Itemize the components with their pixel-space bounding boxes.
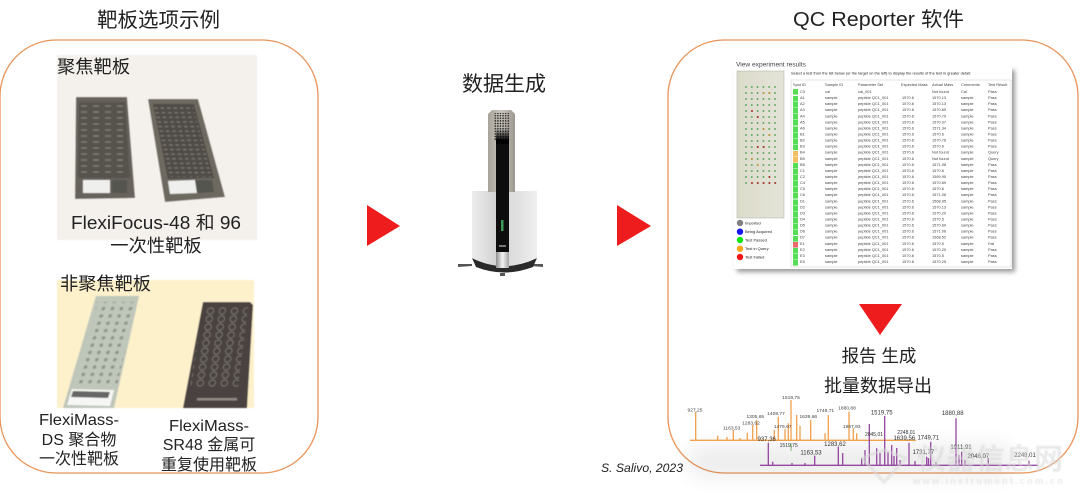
results table: Pass [988, 113, 997, 118]
results table: sample [961, 210, 974, 215]
results table: Pass [988, 168, 997, 173]
results table: peptide QC1_001 [858, 132, 889, 136]
results table: sample [825, 125, 838, 130]
results table [791, 80, 1011, 267]
results table: C6 [800, 192, 805, 197]
results table: Pass [988, 180, 997, 185]
results table: B2 [800, 138, 805, 143]
results table: 1570.20 [932, 247, 947, 252]
results table: Query [988, 150, 999, 155]
chart: orange mass spectrum: 1519,75 [782, 395, 800, 401]
results table: sample [961, 150, 974, 155]
results table: 1570.6 [902, 222, 914, 228]
results table: peptide QC1_001 [858, 192, 889, 197]
results table: Pass [988, 198, 997, 203]
results table: sample [825, 180, 838, 185]
results table: sample [961, 144, 974, 149]
results table: Pass [988, 259, 997, 264]
results table: 1570.6 [902, 119, 914, 124]
status legend: Being Acquired [745, 229, 772, 234]
results table: 1570.6 [902, 180, 914, 185]
chart: orange mass spectrum [688, 395, 916, 440]
results table: sample [825, 156, 838, 161]
results table: 1570.6 [902, 144, 914, 149]
results table: cal_001 [858, 89, 872, 94]
results table: sample [961, 216, 974, 222]
results table: E3 [800, 253, 805, 258]
results table: B3 [800, 144, 805, 149]
results table: 1569.95 [932, 174, 946, 179]
results table: sample [825, 132, 838, 136]
results table: Parameter Set [858, 82, 884, 87]
results table: sample [961, 132, 974, 136]
results table: Pass [988, 132, 997, 136]
results table: sample [825, 253, 838, 258]
results table: 1568.52 [932, 235, 946, 240]
results table: 1570.25 [932, 259, 946, 264]
results table: sample [961, 101, 974, 106]
results table: 1570.69 [932, 180, 946, 185]
results table: Pass [988, 119, 997, 124]
results table: sample [825, 259, 838, 264]
results table: sample [961, 107, 974, 112]
results table: sample [825, 138, 838, 143]
results table: peptide QC1_001 [858, 259, 889, 264]
chart: orange mass spectrum: 1163,53 [723, 426, 741, 432]
results table: 1570.6 [902, 125, 914, 130]
results table: sample [961, 168, 974, 173]
results table: peptide QC1_001 [858, 144, 889, 149]
label: non-focusing target: 非聚焦靶板 [60, 274, 151, 294]
results table: Not found [932, 156, 949, 161]
results table: 1570.6 [902, 162, 914, 167]
results table: B1 [800, 132, 805, 136]
results table: 1570.5 [932, 241, 944, 246]
results table: Pass [988, 222, 997, 228]
caption: FlexiMass-SR48: FlexiMass- [169, 418, 249, 435]
icon: mass spectrometer [458, 110, 543, 276]
chart: orange mass spectrum: 1408,77 [767, 411, 785, 417]
label: focusing target: 聚焦靶板 [57, 56, 130, 77]
results table: sample [961, 174, 974, 179]
status legend: Test Failed [745, 254, 764, 260]
results table: peptide QC1_001 [858, 235, 889, 240]
results table: Pass [988, 253, 997, 258]
heading: QC Reporter software: QC Reporter 软件 [793, 8, 964, 31]
results table: 1570.13 [932, 101, 946, 106]
results table: Not found [932, 150, 949, 155]
results table: 1570.6 [902, 113, 914, 118]
results table: sample [961, 247, 974, 252]
results table: 1571.06 [932, 229, 946, 234]
results table: B5 [800, 156, 805, 161]
photo: focusing targets [57, 55, 257, 240]
results table: Spot ID [793, 82, 806, 87]
results table: peptide QC1_001 [858, 210, 889, 215]
results table: Pass [988, 210, 997, 215]
panel: target options [0, 40, 318, 473]
results table: 1570.6 [902, 186, 914, 191]
results table: sample [825, 222, 838, 228]
results table: 1571.34 [932, 125, 947, 130]
caption: FlexiFocus: FlexiFocus-48 和 96 [71, 213, 241, 233]
chart: purple mass spectrum: 1283,62 [824, 442, 846, 448]
chart: purple mass spectrum: 1880,88 [942, 411, 964, 417]
chart: purple mass spectrum: 1749,71 [917, 436, 940, 442]
watermark: 仪器信息网 [917, 443, 1063, 476]
results table: A2 [800, 101, 805, 106]
results table: sample [825, 174, 838, 179]
instruction line: Select a test from the list below (or the target on the left) to display the results of the test in greater detail: [791, 70, 971, 76]
chart: orange mass spectrum: 1479,67 [774, 424, 792, 430]
results table: peptide QC1_001 [858, 150, 889, 155]
results table: peptide QC1_001 [858, 168, 889, 173]
results table: Pass [988, 101, 997, 106]
results table: sample [825, 144, 838, 149]
results table: sample [961, 186, 974, 191]
caption: FlexiMass-SR48: SR48 金属可 [163, 436, 255, 454]
results table: 1570.6 [902, 168, 914, 173]
results table: C4 [800, 180, 806, 185]
results table: Pass [988, 247, 997, 252]
results table: peptide QC1_001 [858, 180, 889, 185]
results table: 1570.13 [932, 95, 946, 100]
chart: purple mass spectrum: 1731,77 [912, 450, 935, 456]
results table: peptide QC1_001 [858, 174, 889, 179]
chart: purple mass spectrum: 2045,01 [865, 432, 883, 438]
screenshot: experiment results [734, 58, 1015, 272]
results table: sample [825, 101, 838, 106]
results table: Pass [988, 192, 997, 197]
results table: sample [825, 168, 838, 173]
plate: FlexiMass-SR48 [183, 302, 253, 408]
results table: sample [961, 113, 974, 118]
results table: A3 [800, 107, 805, 112]
status legend: Test Passed [745, 238, 767, 242]
results table: sample [961, 235, 974, 240]
results table: peptide QC1_001 [858, 253, 889, 258]
results table: 1570.6 [902, 247, 914, 252]
results table: 1570.07 [932, 119, 946, 124]
results table: sample [961, 241, 974, 246]
results table: sample [961, 204, 974, 209]
results table: Comments [961, 82, 980, 87]
results table: 1570.6 [932, 132, 944, 136]
results table: peptide QC1_001 [858, 204, 889, 209]
caption: FlexiMass-DS [39, 412, 119, 468]
results table: sample [825, 186, 838, 191]
panel: QC Reporter software [668, 40, 1078, 473]
results table: peptide QC1_001 [858, 162, 889, 167]
chart: orange mass spectrum: 1305,65 [746, 414, 764, 420]
results table: peptide QC1_001 [858, 125, 889, 130]
plate: FlexiFocus-96 [148, 99, 225, 202]
results table: D5 [800, 222, 805, 228]
results table: Sample ID [825, 82, 843, 87]
results table: cal [825, 89, 830, 94]
results table: Pass [988, 162, 997, 167]
results table: C2 [800, 174, 805, 179]
results table: 1570.20 [932, 210, 947, 215]
results table: A6 [800, 125, 805, 130]
results table: A1 [800, 95, 805, 100]
results table: 1570.69 [932, 222, 946, 228]
caption: FlexiMass-DS: 一次性靶板 [39, 450, 119, 468]
chart: purple mass spectrum: 1639,56 [893, 436, 916, 442]
results table: 1570.6 [932, 186, 944, 191]
results table: peptide QC1_001 [858, 186, 889, 191]
results table: peptide QC1_001 [858, 95, 889, 100]
results table: Pass [988, 107, 997, 112]
plate: FlexiFocus-48 [75, 97, 135, 199]
results table: D3 [800, 210, 805, 215]
results table: Pass [988, 125, 997, 130]
results table: peptide QC1_001 [858, 113, 889, 118]
chart: purple mass spectrum: 2248,01 [897, 430, 916, 436]
results table: A4 [800, 113, 806, 118]
results table: Fail [988, 241, 994, 246]
caption: FlexiMass-SR48: 重复使用靶板 [161, 456, 257, 474]
results table: Pass [988, 95, 997, 100]
results table: sample [825, 107, 838, 112]
results table: 1570.6 [902, 192, 914, 197]
results table: peptide QC1_001 [858, 216, 889, 222]
arrow: data generation to reporter [617, 205, 651, 246]
results table: 1570.6 [902, 138, 914, 143]
heading: target options: 靶板选项示例 [97, 9, 220, 32]
results table: D1 [800, 198, 805, 203]
results table: sample [825, 162, 838, 167]
results table: 1570.6 [902, 132, 914, 136]
results table: 1568.95 [932, 198, 946, 203]
results table: 1571.06 [932, 192, 946, 197]
results table: Pass [988, 204, 997, 209]
results table: sample [961, 95, 974, 100]
results table: peptide QC1_001 [858, 119, 889, 124]
chart: purple mass spectrum: 1911,91 [950, 445, 972, 451]
results table: 1570.6 [902, 253, 914, 258]
citation: S. Salivo, 2023 [601, 463, 684, 475]
results table: sample [961, 229, 974, 234]
results table: E5 [800, 259, 805, 264]
results table: peptide QC1_001 [858, 138, 889, 143]
results table: 1570.6 [932, 144, 944, 149]
results table: 1570.76 [932, 138, 946, 143]
results table: 1570.5 [932, 216, 944, 222]
results table: 1570.6 [902, 210, 914, 215]
results table: B6 [800, 162, 805, 167]
results table: 1570.70 [932, 113, 947, 118]
results table: sample [825, 235, 838, 240]
chart: orange mass spectrum: 1880,88 [838, 406, 856, 412]
results table: sample [825, 95, 838, 100]
results table: Test Result [988, 82, 1008, 87]
results table: D2 [800, 204, 805, 209]
results table: sample [825, 216, 838, 222]
watermark: www.instrument.com.cn [912, 476, 1063, 487]
caption: FlexiMass-DS: FlexiMass- [39, 412, 119, 429]
results table: E2 [800, 247, 805, 252]
results table: A5 [800, 119, 805, 124]
chart: orange mass spectrum: 1283,62 [742, 420, 760, 426]
results table: sample [961, 138, 974, 143]
results table: peptide QC1_001 [858, 156, 889, 161]
results table: 1570.6 [902, 259, 914, 264]
plate: FlexiMass-DS [63, 296, 139, 408]
results table: Pass [988, 89, 997, 94]
results table: sample [961, 180, 974, 185]
chart: orange mass spectrum: 1639,66 [799, 414, 817, 420]
arrow: results to report [859, 304, 902, 335]
results table: sample [961, 119, 974, 124]
results table: sample [961, 259, 974, 264]
results table: peptide QC1_001 [858, 229, 889, 234]
results table: Pass [988, 174, 997, 179]
status legend: Test in Query [745, 246, 769, 251]
watermark [862, 443, 1063, 487]
results table: Actual Mass [932, 82, 953, 87]
results table: sample [825, 150, 838, 155]
results table: C3 [800, 89, 805, 94]
results table: sample [825, 119, 838, 124]
results table: 1570.6 [902, 95, 914, 100]
results table: Pass [988, 138, 997, 143]
photo: non-focusing targets [57, 280, 254, 408]
results table: Not found [932, 89, 949, 94]
results table: sample [825, 241, 838, 246]
results table: peptide QC1_001 [858, 222, 889, 228]
chart: purple mass spectrum: 1519,75 [871, 410, 893, 416]
results table: D4 [800, 216, 806, 222]
results table: 1571.08 [932, 162, 946, 167]
results table: sample [825, 210, 838, 215]
results table: sample [961, 156, 974, 161]
results table: 1570.6 [902, 107, 914, 112]
chart: orange mass spectrum: 1749,71 [816, 408, 834, 414]
results table: Pass [988, 235, 997, 240]
results table: Pass [988, 144, 997, 149]
chart: purple mass spectrum: 2248,01 [1014, 453, 1036, 459]
chart: purple mass spectrum: 1519,75 [780, 443, 798, 449]
results table: sample [825, 113, 838, 118]
results table: sample [961, 222, 974, 228]
results table: sample [825, 204, 838, 209]
results table: sample [825, 247, 838, 252]
results table: 1570.6 [902, 156, 914, 161]
results table: Query [988, 156, 999, 161]
results table: 1570.6 [902, 174, 914, 179]
results table: sample [961, 162, 974, 167]
results table: C5 [800, 186, 805, 191]
results table: peptide QC1_001 [858, 101, 889, 106]
results table: 1570.6 [902, 235, 914, 240]
text: report generation: 报告 生成 [842, 346, 916, 366]
chart: purple mass spectrum [758, 410, 1038, 465]
results table: sample [961, 198, 974, 203]
results table: Pass [988, 186, 997, 191]
results table: 1570.6 [932, 168, 944, 173]
results table: E1 [800, 241, 805, 246]
results table: peptide QC1_001 [858, 241, 889, 246]
results table: 1570.13 [932, 204, 946, 209]
status legend: Imported [745, 220, 761, 226]
results table: 1570.6 [902, 204, 914, 209]
results table: 1570.6 [902, 241, 914, 246]
results table: D6 [800, 229, 805, 234]
target map [737, 71, 784, 218]
results table: D7 [800, 235, 805, 240]
results table: peptide QC1_001 [858, 247, 889, 252]
results table: B4 [800, 150, 806, 155]
results table: 1570.69 [932, 107, 946, 112]
caption: disposable target: 一次性靶板 [110, 235, 202, 256]
heading: data generation: 数据生成 [462, 73, 546, 96]
results table: peptide QC1_001 [858, 198, 889, 203]
chart: purple mass spectrum: 1163,53 [800, 450, 822, 456]
results table: 1570.6 [902, 216, 914, 222]
status legend [737, 220, 772, 260]
results table: sample [961, 253, 974, 258]
chart: orange mass spectrum: 1967,93 [843, 424, 861, 430]
results table: sample [825, 192, 838, 197]
results table: C1 [800, 168, 805, 173]
text: batch data export: 批量数据导出 [824, 376, 932, 396]
results table: Cal [961, 89, 967, 94]
arrow: targets to data generation [367, 205, 400, 246]
results table: sample [961, 192, 974, 197]
results table: Expected Mass [901, 82, 928, 87]
chart: purple mass spectrum: 2046,07 [967, 454, 990, 460]
results table: 1570.6 [902, 229, 914, 234]
caption: FlexiMass-SR48 [161, 418, 257, 474]
results table: 1570.5 [932, 253, 944, 258]
chart: purple mass spectrum: 937,36 [758, 437, 777, 443]
results table: 1570.6 [902, 198, 914, 203]
results table: sample [825, 198, 838, 203]
chart: orange mass spectrum: 927,25 [688, 408, 703, 414]
caption: FlexiMass-DS: DS 聚合物 [42, 431, 116, 449]
results table: sample [961, 125, 974, 130]
results table: sample [825, 229, 838, 234]
spectrum shadow [690, 445, 1010, 477]
window title: View experiment results [736, 62, 807, 68]
results table: 1570.6 [902, 150, 914, 155]
results table: Pass [988, 229, 997, 234]
results table: peptide QC1_001 [858, 107, 889, 112]
results table: 1570.6 [902, 101, 914, 106]
results table: Pass [988, 216, 997, 222]
